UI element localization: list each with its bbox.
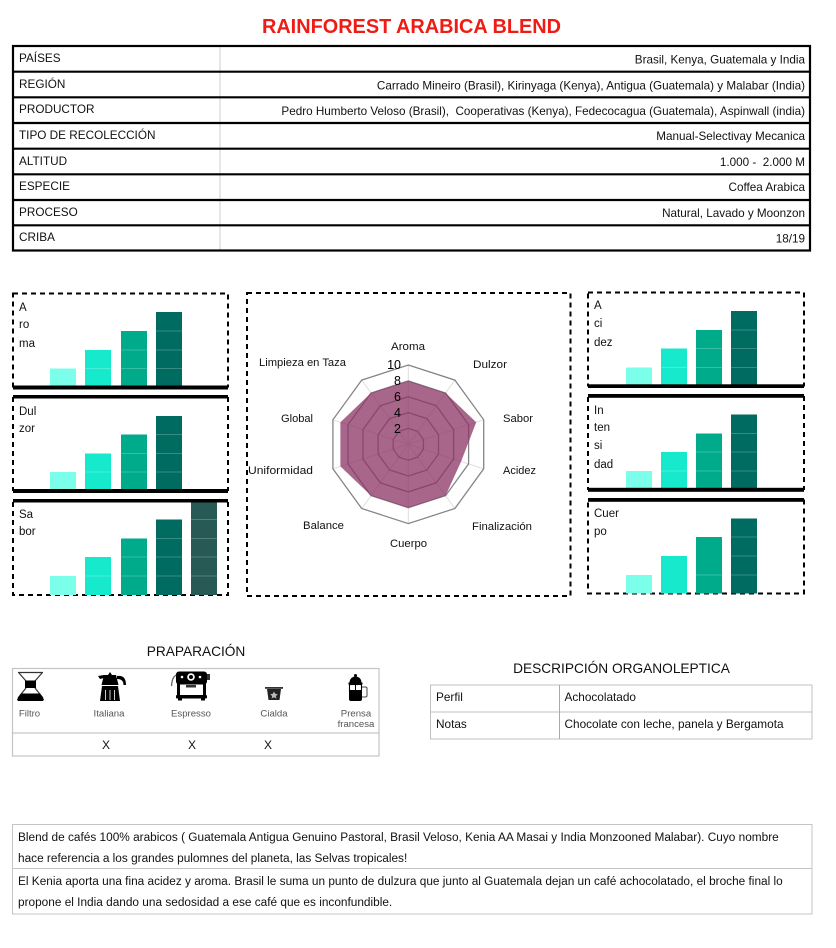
panel: radar chart: Acidez [503,465,536,477]
panel: Dulzor bar chart: Dul [19,406,36,418]
panel: Cuerpo bar chart: Cuer [594,508,619,520]
panel: coffee data table: PAÍSES [19,52,61,65]
panel: radar chart: 4 [394,406,401,420]
panel: radar chart: 8 [394,374,401,388]
panel: Sabor bar chart: Sa [19,509,34,521]
panel: organoleptic table: Chocolate con leche, panela y Bergamota [564,717,784,731]
panel: Cuerpo bar chart: po [594,526,607,538]
panel: Dulzor bar chart: zor [19,423,35,435]
panel: coffee data table: Brasil, Kenya, Guatemala y India [635,54,805,66]
panel: radar chart: 2 [394,422,401,436]
panel: Sabor bar chart: bor [19,526,36,538]
heading: preparation: PRAPARACIÓN [147,644,245,659]
icon: chemex filter [17,672,44,701]
panel: preparation table: Italiana [94,708,125,720]
panel: preparation table: X [264,738,272,752]
panel: Intensidad bar chart: dad [594,459,613,471]
title: RAINFOREST ARABICA BLEND [262,16,561,38]
icon: coffee capsule [265,687,283,700]
panel: organoleptic table: Perfil [436,690,463,704]
panel: coffee data table: TIPO DE RECOLECCIÓN [19,129,155,142]
panel: radar chart: Balance [303,520,344,532]
panel: coffee data table: Coffea Arabica [729,181,805,194]
panel: coffee data table: ESPECIE [19,180,70,193]
panel: preparation table: Filtro [19,708,40,720]
panel: preparation table [12,668,379,756]
panel: coffee data table: PROCESO [19,206,78,219]
panel: Acidez bar chart: dez [594,337,613,349]
text block: blend description: hace referencia a los grandes pulomnes del planeta, las Selvas tropicales! [18,851,407,865]
panel: Intensidad bar chart: si [594,440,602,452]
panel: preparation table: francesa [338,719,375,730]
panel: preparation table: X [102,738,110,752]
icon: espresso machine [172,672,210,700]
panel: Acidez bar chart: A [594,300,602,312]
panel: radar chart [247,293,570,596]
panel: radar chart: Cuerpo [390,538,427,550]
text block: blend description: El Kenia aporta una fina acidez y aroma. Brasil le suma un punto de dulzura que junto al Guatemala dejan un café achocolatado, el broche final lo [18,874,783,888]
panel: Aroma bar chart: ro [19,319,29,331]
panel: radar chart: Global [281,413,313,425]
panel: radar chart: Aroma [391,341,426,353]
panel: preparation table: Cialda [260,708,288,720]
panel: preparation table: X [188,738,196,752]
panel: radar chart: Sabor [503,413,533,425]
panel: coffee data table: REGIÓN [19,78,65,91]
panel: Intensidad bar chart [588,394,804,492]
panel: Dulzor bar chart [13,395,228,493]
panel: organoleptic table: Achocolatado [564,690,636,704]
panel: Acidez bar chart [588,292,804,388]
panel: organoleptic table: Notas [436,717,467,731]
panel: coffee data table: 1.000 - 2.000 M [720,156,805,169]
panel: radar chart: Finalización [472,521,532,533]
panel: coffee data table: CRIBA [19,231,55,244]
panel: coffee data table: PRODUCTOR [19,103,95,116]
text block: blend description: propone el India dando una sedosidad a ese café que es inconfundible. [18,895,392,909]
panel: Cuerpo bar chart [588,498,804,594]
icon: moka pot [98,672,126,701]
icon: french press [348,674,367,701]
heading: organoleptic description: DESCRIPCIÓN ORGANOLEPTICA [513,661,731,676]
panel: Intensidad bar chart: In [594,405,604,417]
panel: Acidez bar chart: ci [594,318,602,330]
panel: Aroma bar chart: A [19,302,27,314]
panel: preparation table: Prensa [341,708,372,720]
panel: coffee data table: 18/19 [776,233,805,246]
panel: radar chart: 10 [387,358,401,372]
panel: Aroma bar chart: ma [19,338,36,350]
text block: blend description: Blend de cafés 100% arabicos ( Guatemala Antigua Genuino Pastoral, Brasil Veloso, Kenia AA Masai y India Monzooned Malabar). Cuyo nombre [18,830,779,844]
panel: coffee data table: Manual-Selectivay Mecanica [656,130,805,143]
panel: radar chart: Limpieza en Taza [259,357,347,369]
panel: coffee data table: Pedro Humberto Veloso (Brasil), Cooperativas (Kenya), Fedecocagua (Guatemala), Aspinwall (india) [281,105,805,118]
panel: coffee data table: Natural, Lavado y Moonzon [662,207,805,220]
panel: radar chart: 6 [394,390,401,404]
panel: preparation table: Espresso [171,708,211,720]
panel: organoleptic table [430,685,812,739]
panel: coffee data table [13,46,810,250]
radar data polygon [340,381,476,508]
panel: Aroma bar chart [13,294,228,390]
text block: blend description [12,824,812,914]
panel: Intensidad bar chart: ten [594,422,610,434]
panel: coffee data table: ALTITUD [19,155,67,168]
panel: Sabor bar chart [13,499,228,595]
panel: coffee data table: Carrado Mineiro (Brasil), Kirinyaga (Kenya), Antigua (Guatemala) y Malabar (India) [377,79,805,92]
panel: radar chart: Dulzor [473,359,507,371]
panel: radar chart: Uniformidad [248,465,313,477]
